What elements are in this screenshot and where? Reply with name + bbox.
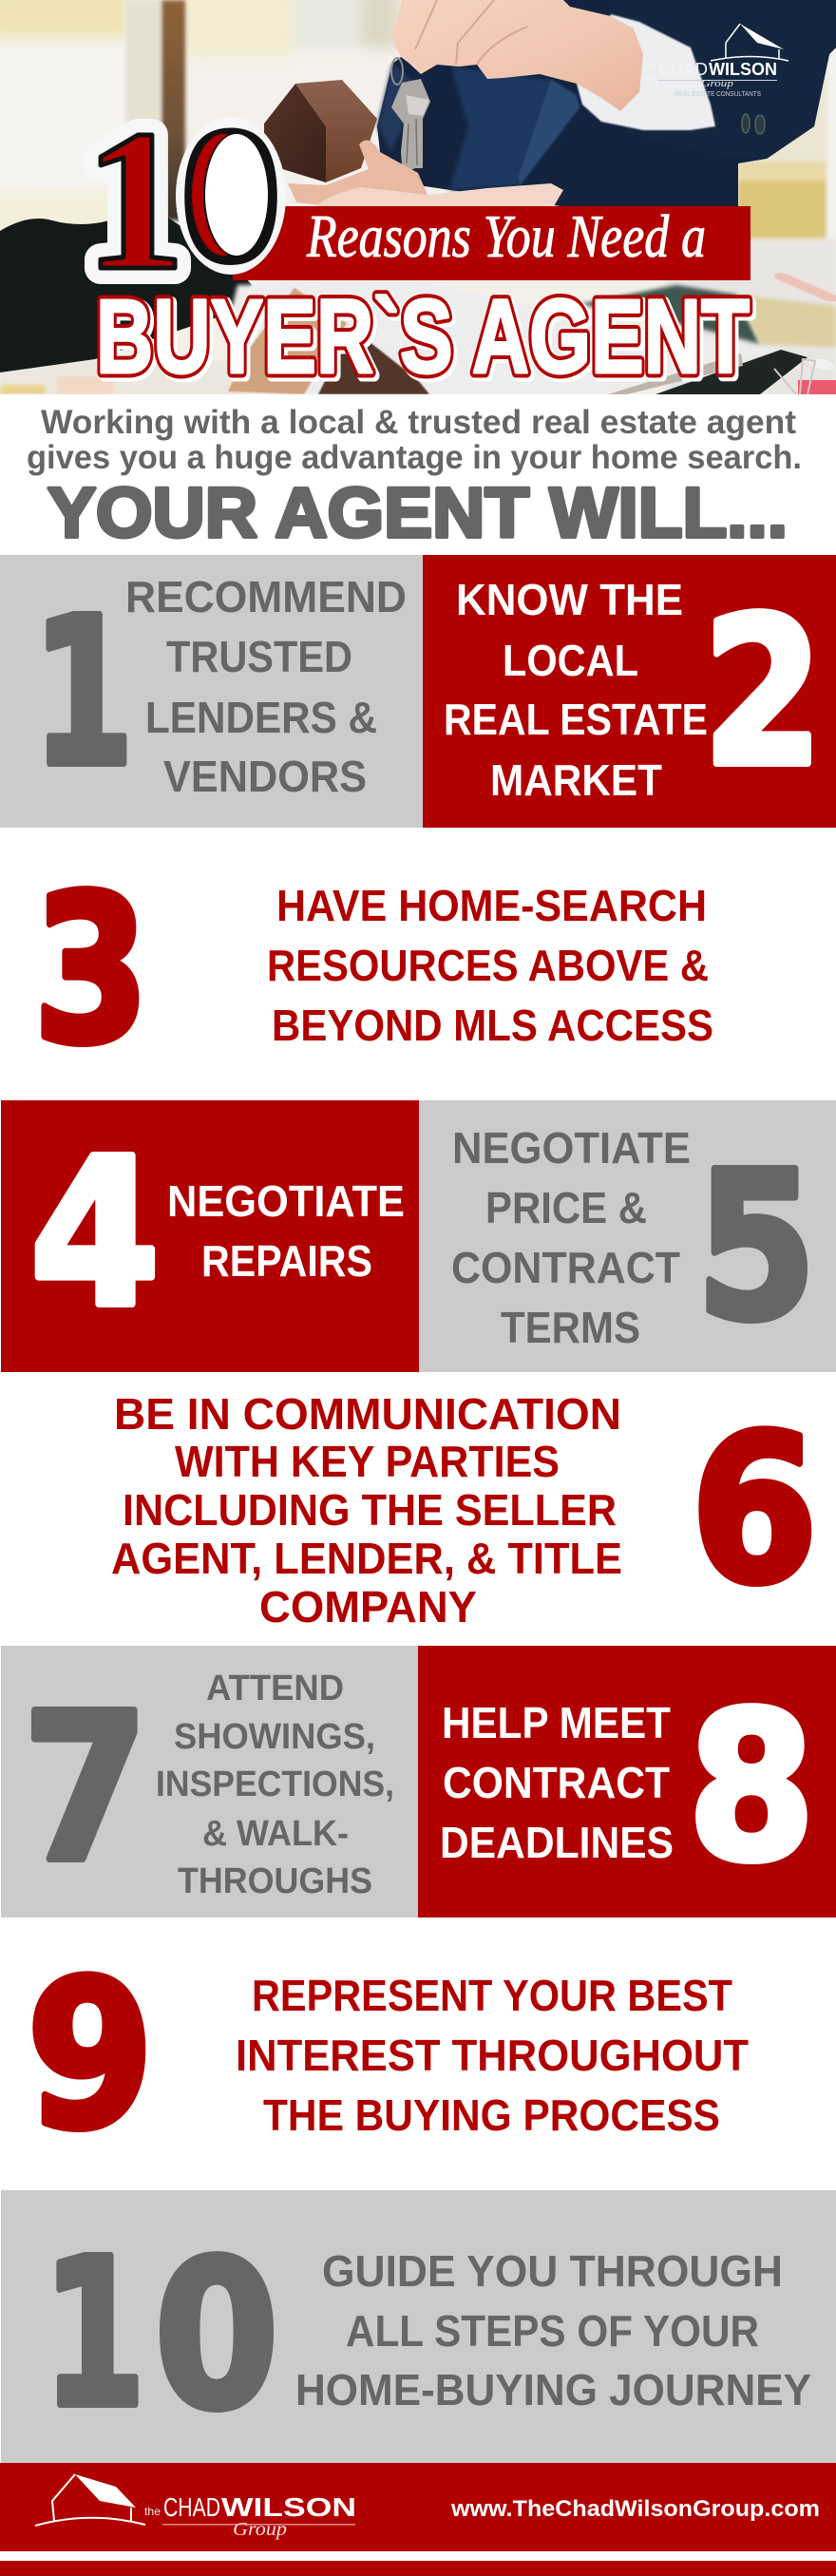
suit sleeve — [767, 48, 836, 159]
text: reason 2: KNOW THE — [456, 575, 683, 624]
logo: the Chad Wilson Group, real estate consultants: the — [649, 67, 658, 77]
numeral 1: 1 — [85, 88, 185, 312]
footer logo: the — [144, 2505, 161, 2518]
text: reason 1: TRUSTED — [166, 632, 352, 681]
text: reason 4 — [167, 1176, 405, 1286]
shirt and tie panel — [449, 67, 580, 190]
text: reason 3: BEYOND MLS ACCESS — [272, 1001, 713, 1050]
text: reason 3: HAVE HOME-SEARCH — [276, 881, 707, 930]
number 10: 1 — [43, 2216, 145, 2452]
text: reason 10: HOME-BUYING JOURNEY — [295, 2365, 811, 2414]
panel: reason 3 — [33, 852, 713, 1089]
window background — [0, 0, 399, 238]
text: reason 7: THROUGHS — [178, 1861, 372, 1901]
number 2: 2 — [703, 575, 823, 811]
text: reason 7 — [156, 1669, 394, 1901]
text: reason 5: NEGOTIATE — [452, 1123, 691, 1173]
logo: the Chad Wilson Group, real estate consultants: Group — [701, 78, 734, 89]
text: reason 2: MARKET — [490, 755, 662, 805]
panel: reason 6 — [111, 1389, 818, 1631]
website url: www.TheChadWilsonGroup.com — [450, 2496, 820, 2522]
text: reason 10: ALL STEPS OF YOUR — [346, 2306, 759, 2356]
footer logo: Group — [233, 2519, 287, 2540]
text: reason 5: CONTRACT — [451, 1243, 680, 1292]
logo: the Chad Wilson Group, real estate consultants — [649, 24, 788, 98]
back wall and table at right — [0, 70, 834, 394]
text: reason 2: REAL ESTATE — [444, 695, 708, 744]
panel: reason 9 — [27, 1937, 749, 2175]
text: reason 1: RECOMMEND — [125, 572, 407, 621]
text: reason 5: PRICE & — [485, 1183, 647, 1232]
navy suit — [377, 0, 836, 206]
intro text: gives you a huge advantage in your home search. — [27, 439, 802, 476]
supporting hand behind house — [288, 141, 428, 206]
panel: reason 5 — [419, 1100, 836, 1372]
text: reason 10 — [295, 2246, 811, 2414]
footer — [0, 2463, 836, 2576]
number 5: 5 — [696, 1129, 816, 1365]
left jacket highlight — [377, 64, 418, 152]
numeral 0: 0 — [177, 88, 285, 305]
key bunch — [391, 58, 430, 171]
number 6: 6 — [691, 1392, 818, 1630]
number 3: 3 — [33, 852, 149, 1089]
text: reason 10: GUIDE YOU THROUGH — [322, 2246, 783, 2296]
panel: reason 1 — [0, 555, 423, 828]
text: reason 1: VENDORS — [163, 752, 367, 801]
intro text — [27, 404, 802, 476]
number 10: 0 — [154, 2217, 279, 2454]
text: reason 7: & WALK- — [202, 1814, 349, 1854]
panel: reason 7 — [1, 1646, 418, 1918]
text: reason 6: BE IN COMMUNICATION — [114, 1389, 621, 1439]
suit lapel highlight — [519, 80, 580, 185]
text: reason 6: INCLUDING THE SELLER — [123, 1485, 617, 1535]
number 7: 7 — [23, 1670, 148, 1907]
text: reason 3 — [267, 881, 713, 1050]
sleeve buttons — [742, 114, 765, 134]
text: reason 2: LOCAL — [503, 636, 638, 685]
text: reason 8: HELP MEET — [442, 1698, 671, 1747]
window frame and post — [126, 0, 185, 228]
panel: reason 2 — [423, 555, 836, 828]
logo: the Chad Wilson Group, real estate consultants: REAL ESTATE CONSULTANTS — [674, 91, 761, 98]
text: reason 3: RESOURCES ABOVE & — [267, 941, 709, 990]
text: reason 9: REPRESENT YOUR BEST — [252, 1971, 732, 2020]
heading: Your agent will: YOUR AGENT WILL... — [48, 473, 788, 552]
text: reason 2 — [444, 575, 708, 805]
contract papers — [228, 276, 836, 394]
text: reason 7: SHOWINGS, — [174, 1717, 375, 1757]
text: reason 4: NEGOTIATE — [167, 1176, 405, 1226]
numeral 10 sticker — [84, 117, 286, 284]
upper hand — [391, 0, 643, 111]
footer logo: CHAD — [163, 2492, 220, 2522]
text: reason 8 — [440, 1698, 674, 1867]
panel: reason 10 — [1, 2190, 836, 2463]
text: reason 6: COMPANY — [259, 1582, 477, 1631]
text: reason 1 — [125, 572, 407, 801]
footer logo: WILSON — [221, 2492, 356, 2522]
logo: house icon — [35, 2474, 145, 2526]
panel: reason 8 — [418, 1646, 836, 1918]
shirt cuff — [577, 14, 715, 130]
number 10 — [43, 2216, 279, 2454]
panel: reason 4 — [1, 1100, 419, 1372]
intro text: Working with a local & trusted real estate agent — [41, 404, 796, 441]
number 1: 1 — [32, 574, 134, 811]
text: reason 6 — [111, 1389, 622, 1631]
banner: Reasons You Need a — [233, 202, 750, 280]
finger creases — [415, 0, 527, 65]
text: reason 8: DEADLINES — [440, 1818, 674, 1867]
banner: Reasons You Need a: Reasons You Need a — [306, 202, 706, 270]
text: reason 8: CONTRACT — [443, 1758, 670, 1807]
text: reason 9: INTEREST THROUGHOUT — [236, 2031, 749, 2080]
text: reason 9: THE BUYING PROCESS — [263, 2090, 720, 2140]
text: reason 5 — [451, 1123, 691, 1352]
dark sweater sleeve — [0, 217, 252, 372]
text: reason 7: INSPECTIONS, — [156, 1765, 394, 1804]
text: reason 6: AGENT, LENDER, & TITLE — [111, 1534, 622, 1583]
number 4: 4 — [30, 1116, 160, 1352]
text: reason 6: WITH KEY PARTIES — [175, 1437, 560, 1486]
text: reason 9 — [236, 1971, 749, 2140]
number 9: 9 — [27, 1937, 154, 2175]
footer logo — [35, 2474, 356, 2540]
logo: the Chad Wilson Group, real estate consultants: WILSON — [709, 60, 777, 79]
open palm — [316, 183, 563, 206]
text: reason 5: TERMS — [501, 1303, 640, 1352]
wooden house model — [264, 80, 377, 182]
number 8: 8 — [688, 1670, 815, 1907]
numeral 1: 1 — [85, 88, 185, 312]
logo: the Chad Wilson Group, real estate consultants: CHAD — [658, 60, 708, 79]
text: reason 4: REPAIRS — [201, 1236, 372, 1286]
hero photo: agent handing keys to buyer — [0, 0, 836, 399]
text: reason 1: LENDERS & — [145, 693, 377, 742]
text: reason 7: ATTEND — [206, 1669, 344, 1708]
